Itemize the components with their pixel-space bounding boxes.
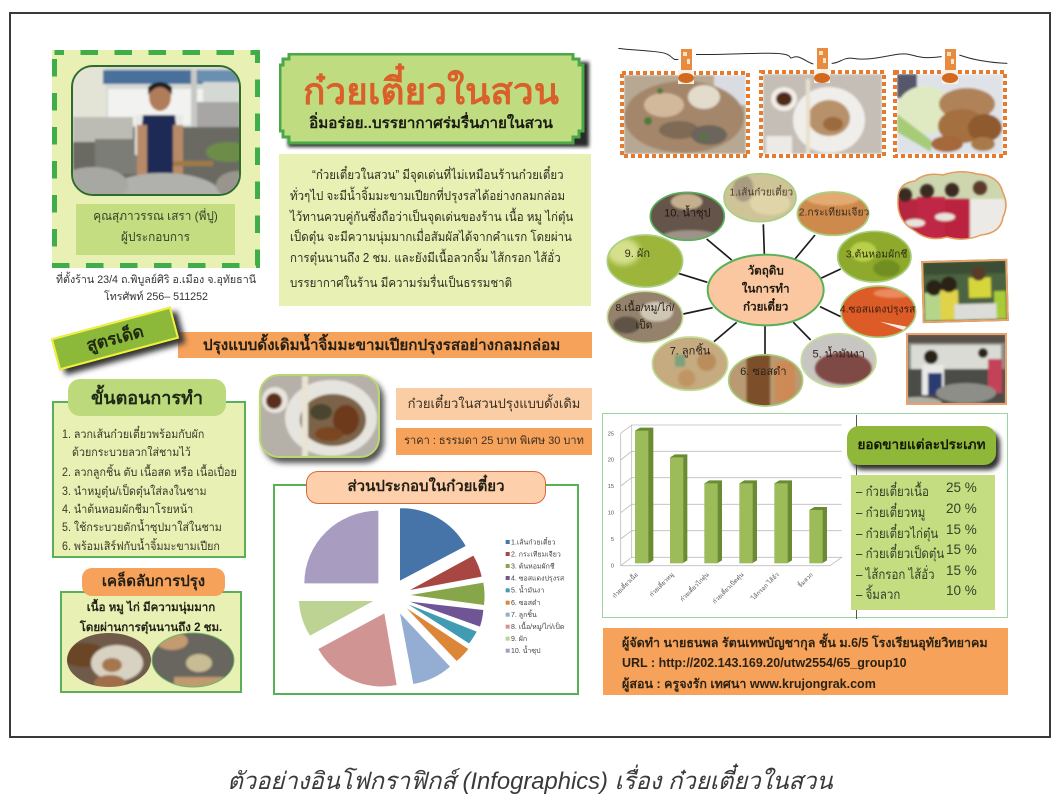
photo: noodle bowl on table (759, 70, 886, 158)
sales list: – ก๋วยเตี๋ยวเป็ดตุ๋น (856, 546, 944, 561)
bar chart: จิ้มลวก (794, 569, 815, 590)
panel: bar chart (602, 413, 1008, 618)
shop address: ที่ตั้งร้าน 23/4 ถ.พิบูลย์ศิริ อ.เมือง จ.อุทัยธานี (56, 274, 256, 286)
tip text: เนื้อ หมู ไก่ มีความนุ่มมาก (87, 602, 215, 614)
sales heading: ยอดขายแต่ละประเภท (858, 437, 985, 452)
pie legend: 5. น้ำมันงา (511, 584, 544, 595)
sales list: – ก๋วยเตี๋ยวไก่ตุ๋น (856, 526, 938, 541)
photo: owner at noodle stall (71, 65, 241, 196)
pie legend: 8. เนื้อ/หมู/ไก่/เป็ด (511, 620, 564, 631)
intro paragraph: ทั่วๆไป จะมีน้ำจิ้มมะขามเปียกที่ปรุงรสได้อย่างกลมกล่อม (290, 189, 565, 203)
sales list: – ไส้กรอก ไส้อั่ว (856, 567, 935, 582)
center oval: ในการทำ (742, 280, 790, 295)
dotted frame (893, 70, 1007, 158)
intro paragraph: บรรยากาศในร้าน มีความร่มรื่นเป็นธรรมชาติ (290, 276, 512, 290)
sales list (851, 475, 995, 610)
dotted frame (620, 71, 750, 158)
step list: 5. ใช้กระบวยตักน้ำซุปมาใส่ในชาม (62, 522, 222, 534)
credits panel: URL : http://202.143.169.20/utw2554/65_group10 (622, 656, 907, 670)
ingredient 5: sesame oil: 5. น้ำมันงา (813, 346, 865, 361)
caption: ตัวอย่างอินโฟกราฟิกส์ (Infographics) เรื่อง ก๋วยเตี๋ยวในสวน (227, 768, 833, 795)
ingredient 8: meat (607, 291, 684, 344)
intro paragraph: ไว้ทานควบคู่กันซึ่งถือว่าเป็นจุดเด่นของร้าน เนื้อ หมู ไก่ตุ๋น (290, 210, 573, 224)
steps heading: ขั้นตอนการทำ (91, 388, 203, 408)
tips heading (82, 568, 225, 596)
recipe tag (51, 307, 179, 370)
panel: owner card (52, 50, 260, 268)
dotted frame (759, 70, 886, 158)
ingredient 2: fried garlic (797, 191, 870, 237)
title banner (279, 53, 592, 150)
ingredient 10: soup: 10. น้ำซุป (664, 204, 711, 219)
recipe tag: สูตรเด็ด (84, 322, 146, 355)
step list: 4. นำต้นหอมผักชีมาโรยหน้า (62, 504, 193, 516)
owner name box: ผู้ประกอบการ (121, 230, 190, 244)
intro paragraph: เป็ดตุ๋น จะมีความนุ่มมากเมื่อสัมผัสได้จากคำแรก โดยผ่าน (290, 230, 572, 244)
ingredients diagram (606, 172, 916, 407)
price label: ราคา : ธรรมดา 25 บาท พิเศษ 30 บาท (404, 435, 584, 447)
divider line (856, 415, 857, 619)
ingredient 9: vegetables (607, 234, 684, 288)
title plate (279, 53, 592, 150)
tips heading: เคล็ดลับการปรุง (102, 573, 205, 590)
ingredient 7: meatballs: 7. ลูกชิ้น (670, 342, 711, 357)
step list: 2. ลวกลูกชิ้น ตับ เนื้อสด หรือ เนื้อเปื่อย (62, 467, 237, 479)
sales heading (847, 426, 996, 465)
ingredient 10: soup (650, 192, 725, 243)
pie chart heading (306, 471, 546, 504)
pie legend: 1.เส้นก๋วยเตี๋ยว (511, 537, 556, 546)
main title: ก๋วยเตี๋ยวในสวน (303, 71, 559, 112)
bar chart (608, 424, 843, 605)
bar chart: 5 (611, 537, 614, 543)
ingredient 1: noodles (723, 172, 797, 222)
tip text: โดยผ่านการตุ๋นนานถึง 2 ชม. (80, 622, 222, 634)
pie legend: 9. ผัก (511, 635, 527, 643)
photo: noodle bowl (259, 374, 380, 458)
bar chart: ก๋วยเตี๋ยวเป็ดตุ๋น (710, 570, 745, 605)
bar chart: ก๋วยเตี๋ยวหมู (647, 570, 675, 599)
ingredient 6: black sauce (728, 354, 803, 408)
photo: sausages and greens (893, 70, 1007, 158)
sales list: 15 % (946, 542, 977, 557)
pie legend: 6. ซอสดำ (511, 599, 541, 607)
bar chart: ก๋วยเตี๋ยวไก่ตุ๋น (677, 570, 711, 603)
step list: 6. พร้อมเสิร์ฟกับน้ำจิ้มมะขามเปียก (62, 541, 220, 553)
ingredient 4: red sauce (840, 285, 917, 338)
tradition label (396, 388, 592, 420)
sales list: 10 % (946, 583, 977, 598)
ingredient 1: noodles: 1.เส้นก๋วยเตี๋ยว (730, 184, 793, 199)
step list: 1. ลวกเส้นก๋วยเตี๋ยวพร้อมกับผัก (62, 429, 204, 441)
tip photos (67, 632, 234, 688)
recipe banner bar (178, 332, 592, 358)
credits panel (603, 628, 1008, 695)
ingredient 5: sesame oil (800, 333, 877, 388)
credits panel: ผู้สอน : ครูจงรัก เทศนา www.krujongrak.com (622, 677, 876, 691)
pie legend: 4. ซอสแดงปรุงรส (511, 575, 565, 582)
ingredient 2: fried garlic: 2.กระเทียมเจียว (799, 207, 869, 219)
shop address (56, 272, 256, 303)
pie chart (299, 508, 565, 686)
owner name box (76, 204, 235, 255)
bar chart: 25 (608, 431, 614, 437)
owner name box: คุณสุภาวรรณ เสรา (พี่ปู) (93, 209, 218, 223)
ingredient 8: meat: เป็ด (636, 317, 652, 331)
photo: group with bowls (897, 171, 1007, 240)
photo: students at table (921, 259, 1009, 323)
icon: photo clips (678, 48, 958, 84)
step list: ด้วยกระบวยลวกใส่ชามไว้ (72, 447, 191, 459)
center oval: ก๋วยเตี๋ยว (743, 297, 788, 313)
bar chart: ก๋วยเตี๋ยวเนื้อ (609, 569, 640, 600)
sales list: 15 % (946, 522, 977, 537)
photo: flat noodles (620, 71, 750, 158)
panel: steps (52, 401, 246, 558)
ingredient 3: spring onion: 3.ต้นหอมผักชี (846, 249, 907, 261)
bar chart: 20 (608, 458, 614, 464)
intro paragraph (279, 154, 591, 306)
price label (396, 428, 592, 455)
sales list: 15 % (946, 563, 977, 578)
sales list: – ก๋วยเตี๋ยวหมู (856, 505, 925, 520)
bar chart: 0 (611, 564, 614, 570)
credits panel: ผู้จัดทำ นายธนพล รัตนเทพบัญชากุล ชั้น ม.6/5 โรงเรียนอุทัยวิทยาคม (622, 636, 988, 650)
pie legend (506, 537, 565, 655)
pie legend: 7. ลูกชิ้น (511, 608, 537, 619)
ingredient 8: meat: 8.เนื้อ/หมู/ไก่/ (615, 300, 675, 314)
recipe banner bar: ปรุงแบบดั้งเดิมน้ำจิ้มมะขามเปียกปรุงรสอย่างกลมกล่อม (203, 337, 560, 354)
intro paragraph: “ก๋วยเตี๋ยวในสวน” มีจุดเด่นที่ไม่เหมือนร้านก๋วยเตี๋ยว (312, 168, 564, 182)
ingredient 6: black sauce: 6. ซอสดำ (740, 366, 787, 378)
tradition label: ก๋วยเตี๋ยวในสวนปรุงแบบดั้งเดิม (408, 396, 580, 411)
tip text (80, 598, 222, 634)
intro paragraph: การตุ๋นนานถึง 2 ชม. และยังมีเนื้อลวกจิ้ม ไส้กรอก ไส้อั่ว (290, 251, 561, 265)
bar chart: ไส้กรอก ไส้อั่ว (749, 571, 781, 603)
shop address: โทรศัพท์ 256– 511252 (104, 291, 208, 303)
photo: cook at stall (906, 333, 1007, 405)
ingredient 7: meatballs (652, 337, 729, 392)
sales list: – จิ้มลวก (856, 587, 900, 602)
ingredient 4: red sauce: 4.ซอสแดงปรุงรส (840, 304, 916, 315)
center oval (708, 255, 824, 325)
pie legend: 3. ต้นหอมผักชี (511, 562, 555, 570)
bar chart: 15 (608, 484, 614, 490)
subtitle: อิ่มอร่อย..บรรยากาศร่มรื่นภายในสวน (309, 115, 553, 132)
step list: 3. นำหมูตุ๋น/เป็ดตุ๋นใส่ลงในชาม (62, 486, 207, 498)
dashed card border (52, 50, 260, 268)
sales list: – ก๋วยเตี๋ยวเนื้อ (856, 484, 929, 499)
panel: cooking tips (60, 591, 242, 693)
hanging string (618, 48, 1008, 64)
panel: pie chart (273, 484, 579, 695)
ingredient 9: vegetables: 9. ผัก (625, 248, 650, 260)
pie chart heading: ส่วนประกอบในก๋วยเตี๋ยว (347, 478, 505, 495)
sales list: 20 % (946, 501, 977, 516)
center oval: วัตถุดิบ (748, 264, 784, 278)
steps heading (68, 379, 226, 416)
pie legend: 2. กระเทียมเจียว (511, 550, 561, 558)
bar chart: 10 (608, 511, 614, 517)
ingredient 3: spring onion (837, 230, 912, 283)
pie legend: 10. น้ำซุป (511, 644, 541, 655)
sales list: 25 % (946, 480, 977, 495)
step list (62, 426, 237, 553)
